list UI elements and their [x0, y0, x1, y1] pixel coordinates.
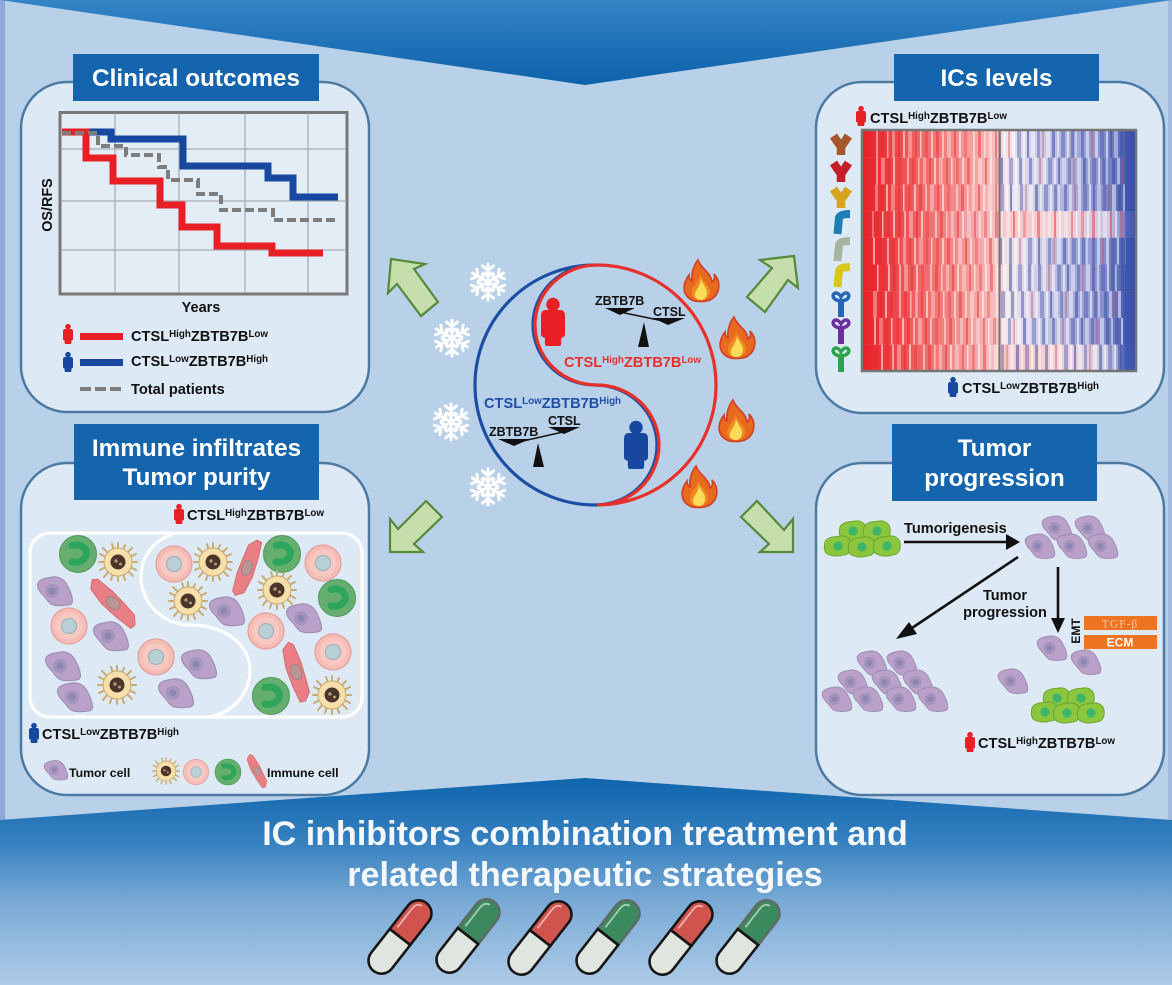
label: high group: High	[225, 508, 247, 519]
label: low group: CTSL	[42, 727, 80, 743]
label: tumor progression: progression	[963, 605, 1047, 621]
arrow: progression to mass	[896, 557, 1018, 639]
label: high group	[856, 106, 1007, 127]
legend: tumor cell	[44, 760, 130, 780]
total patients curve	[62, 133, 338, 220]
top banner	[0, 0, 1172, 85]
label: tumorigenesis: Tumorigenesis	[904, 521, 1007, 537]
blue person	[624, 421, 648, 469]
label: high group: CTSL	[187, 508, 225, 524]
flames	[682, 260, 755, 508]
legend: CTSL	[131, 329, 169, 345]
tumor microenvironment boundary	[30, 533, 362, 717]
blue survival curve	[62, 132, 338, 197]
label: low group: ZBTB7B	[100, 727, 157, 743]
heading: immune infiltrates tumor purity: Immune infiltrates	[92, 435, 301, 462]
heatmap	[862, 130, 1136, 371]
legend: Low	[169, 354, 189, 365]
group label: low: High	[599, 396, 621, 407]
red survival curve	[62, 132, 323, 253]
normal cell cluster	[824, 521, 900, 557]
capsules	[363, 894, 785, 980]
label: high group: High	[908, 111, 930, 122]
legend: High	[169, 329, 191, 340]
group label: high: CTSL	[564, 355, 602, 371]
label: low group	[948, 377, 1099, 397]
tumor mass	[822, 651, 948, 711]
group label: low: CTSL	[484, 396, 522, 412]
legend: immune cell: Immune cell	[267, 766, 339, 780]
panel: immune infiltrates and tumor purity	[21, 424, 369, 795]
x axis label: Years	[182, 300, 220, 316]
legend: ZBTB7B	[189, 354, 246, 370]
cell field	[37, 536, 356, 714]
ECM box	[1084, 635, 1157, 650]
group label: low: ZBTB7B	[542, 396, 599, 412]
heading: tumor progression: progression	[924, 465, 1065, 492]
red person	[541, 298, 565, 346]
panel frame	[21, 82, 369, 412]
left edge strip	[0, 0, 5, 820]
legend: ZBTB7B	[191, 329, 248, 345]
balance: high ZBTB7B: ZBTB7B	[489, 425, 538, 439]
label: low group	[29, 723, 179, 743]
normal cell cluster lower	[1031, 688, 1104, 723]
antibody icons	[833, 136, 850, 372]
legend	[63, 324, 268, 398]
central yin-yang	[475, 265, 716, 505]
legend: Total patients	[131, 382, 225, 398]
right edge strip	[1168, 0, 1172, 820]
survival chart	[60, 112, 347, 294]
heading: tumor progression	[892, 424, 1097, 501]
arrow: to tumor progression	[741, 501, 793, 552]
label: high group: ZBTB7B	[247, 508, 304, 524]
TGF-beta box	[1084, 616, 1157, 630]
group label: high: High	[602, 355, 624, 366]
heading: immune infiltrates tumor purity	[74, 424, 319, 500]
balance: high CTSL: ZBTB7B	[595, 294, 644, 308]
heading: tumor progression: Tumor	[958, 435, 1032, 462]
legend: CTSL	[131, 354, 169, 370]
group label: low: Low	[522, 396, 542, 407]
label: high group: Low	[987, 111, 1007, 122]
heading: ICs levels	[894, 54, 1099, 101]
tumor cell cluster	[1025, 516, 1118, 558]
label: low group: High	[1077, 381, 1099, 392]
snowflakes	[433, 264, 506, 505]
panel frame	[816, 463, 1164, 795]
balance: high ZBTB7B: CTSL	[548, 414, 581, 428]
label: low group: High	[157, 727, 179, 738]
panel frame	[21, 463, 369, 795]
panel: ICs levels	[816, 54, 1164, 413]
label: low group: Low	[80, 727, 100, 738]
heading: clinical outcomes	[73, 54, 319, 101]
arrow: progression to EMT	[1051, 567, 1065, 633]
label: tumor progression	[963, 588, 1047, 621]
legend: High	[246, 354, 268, 365]
group label: high: Low	[681, 355, 701, 366]
legend: Low	[248, 329, 268, 340]
panel: clinical outcomes	[21, 54, 369, 412]
label: high group	[965, 732, 1115, 752]
bottom title	[262, 815, 908, 894]
bottom banner	[0, 778, 1172, 985]
y axis label: OS/RFS	[40, 178, 56, 232]
label: high group: High	[1016, 736, 1038, 747]
label: low group: Low	[1000, 381, 1020, 392]
label: high group: ZBTB7B	[1038, 736, 1095, 752]
balance: high ZBTB7B	[489, 414, 581, 467]
label: high group: CTSL	[978, 736, 1016, 752]
arrow: tumorigenesis	[904, 534, 1020, 550]
heading: ICs levels: ICs levels	[940, 65, 1053, 92]
balance: high CTSL	[595, 294, 686, 347]
ECM box: ECM	[1107, 636, 1133, 650]
red half outline	[535, 265, 716, 505]
arrow: to ICs levels	[747, 256, 798, 312]
migrating tumor cells	[998, 636, 1101, 693]
label: high group: ZBTB7B	[930, 111, 987, 127]
label: high group: CTSL	[870, 111, 908, 127]
arrow: to clinical outcomes	[388, 259, 438, 316]
arrow: to immune infiltrates	[390, 501, 442, 552]
label: low group: CTSL	[962, 381, 1000, 397]
label: high group: Low	[1095, 736, 1115, 747]
TGF-beta box: TGF-β	[1102, 618, 1138, 630]
label: high group: Low	[304, 508, 324, 519]
panel: tumor progression	[816, 424, 1164, 795]
label: high group	[174, 504, 324, 524]
heading: clinical outcomes: Clinical outcomes	[92, 65, 300, 92]
bottom title: related therapeutic strategies	[347, 856, 823, 894]
EMT label: EMT	[1069, 618, 1083, 644]
heading: immune infiltrates tumor purity: Tumor purity	[122, 464, 271, 491]
legend: immune cell	[153, 753, 339, 789]
group label: high: ZBTB7B	[624, 355, 681, 371]
panel frame	[816, 82, 1164, 413]
label: tumor progression: Tumor	[983, 588, 1027, 604]
bottom title: IC inhibitors combination treatment and	[262, 815, 908, 853]
label: low group: ZBTB7B	[1020, 381, 1077, 397]
balance: high CTSL: CTSL	[653, 305, 686, 319]
legend: tumor cell: Tumor cell	[69, 766, 130, 780]
blue half outline	[475, 265, 657, 505]
